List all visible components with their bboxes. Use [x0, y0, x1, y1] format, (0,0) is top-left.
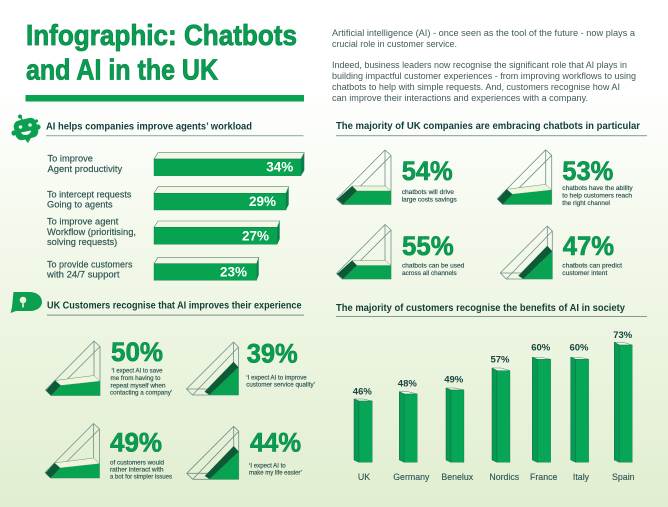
column: Nordics 57%: Nordics — [489, 472, 520, 482]
bar: 29% — [47, 187, 289, 210]
column: Nordics 57%: 57% — [490, 355, 510, 366]
stat: 53%: the right channel — [562, 200, 610, 207]
bar: 29%: To intercept requests — [47, 189, 132, 199]
stat: 44% — [187, 426, 302, 479]
bar chart: countries — [353, 330, 635, 482]
bar chart: agents workload — [46, 153, 304, 280]
column: France 60%: 60% — [531, 343, 551, 354]
stat: 55%: chatbots can be used — [402, 262, 465, 269]
column: Germany 48%: 48% — [398, 379, 417, 390]
stat: 49%: 49% — [110, 428, 162, 458]
title: Infographic: Chatbots — [26, 20, 297, 52]
stat: 44%: ‘I expect AI to — [249, 463, 286, 470]
bar: 29%: Going to agents — [47, 200, 113, 210]
heading: customers experience: UK Customers recognise that AI improves their experience — [47, 299, 302, 311]
column: France 60%: France — [530, 472, 557, 482]
bar: 29%: 29% — [249, 194, 276, 209]
intro text: can improve their interactions and experiences with a company. — [332, 93, 588, 104]
icon: prism 54% — [336, 150, 391, 204]
column: Benelux 49%: Benelux — [441, 472, 474, 482]
bar: 27%: To improve agent — [47, 217, 119, 227]
bar: 23%: 23% — [220, 265, 247, 280]
column: UK 46%: 46% — [353, 386, 372, 397]
column: Spain 73%: 73% — [613, 330, 633, 341]
title underline bar — [26, 95, 304, 102]
bar: 23% — [46, 257, 259, 280]
column: Spain 73% — [612, 330, 635, 482]
icon: prism 55% — [336, 224, 391, 279]
stat: 50%: ‘I expect AI to save — [112, 367, 163, 374]
bar: 23%: To provide customers — [47, 260, 133, 270]
stat: 53%: chatbots have the ability — [562, 185, 633, 192]
column: Nordics 57% — [489, 355, 520, 482]
stat: 49%: rather interact with — [110, 466, 164, 473]
stat: 50% — [46, 337, 173, 396]
heading: companies chatbots: The majority of UK companies are embracing chatbots in particular — [336, 120, 640, 132]
icon: prism 44% — [187, 426, 239, 479]
stat: 47%: customer intent — [562, 270, 607, 277]
icon: prism 50% — [46, 341, 100, 396]
column: UK 46% — [353, 386, 372, 482]
intro text: Artificial intelligence (AI) - once seen as the tool of the future - now plays a — [332, 28, 636, 39]
stat: 50%: contacting a company’ — [110, 389, 173, 396]
column: Benelux 49% — [441, 375, 474, 482]
stat: 44%: 44% — [250, 428, 301, 458]
column: France 60% — [530, 343, 557, 482]
stat: 44%: make my life easier’ — [249, 470, 302, 477]
bar: 23%: with 24/7 support — [46, 270, 120, 280]
bar: 27%: 27% — [242, 229, 269, 244]
title: and AI in the UK — [26, 54, 218, 86]
stat: 49%: of customers would — [110, 459, 164, 466]
stat: 54% — [336, 150, 457, 204]
column: Italy 60%: Italy — [573, 472, 590, 482]
stat: 53% — [497, 150, 633, 207]
stat: 47%: chatbots can predict — [562, 262, 622, 269]
icon: prism 53% — [497, 150, 552, 204]
stat: 39%: 39% — [247, 338, 298, 368]
icon: prism 47% — [500, 226, 552, 279]
intro text: chatbots to help with simple requests. And, customers recognise how AI — [332, 82, 620, 93]
icon: prism 39% — [186, 342, 238, 395]
stat: 53%: to help customers reach — [562, 193, 632, 200]
bar: 27% — [47, 217, 280, 247]
stat: 55% — [336, 224, 465, 279]
icon: robot — [11, 114, 41, 143]
stat: 49% — [45, 424, 173, 480]
stat: 55%: 55% — [402, 231, 454, 261]
column: Italy 60%: 60% — [569, 343, 589, 354]
stat: 49%: a bot for simpler issues — [110, 473, 173, 480]
column: Benelux 49%: 49% — [444, 375, 464, 386]
stat: 39%: customer service quality’ — [246, 382, 315, 389]
icon: speech bubble with lightbulb — [10, 292, 42, 313]
heading: agents workload: AI helps companies improve agents’ workload — [46, 120, 252, 132]
bar: 27%: solving requests) — [47, 237, 117, 247]
intro text: Indeed, business leaders now recognise the significant role that AI plays in — [332, 60, 627, 71]
stat: 54%: large costs savings — [402, 196, 457, 203]
stat: 50%: 50% — [111, 337, 163, 367]
bar: 27%: Workflow (prioritising, — [47, 227, 136, 237]
stat: 47%: 47% — [563, 231, 614, 261]
intro text: building impactful customer experiences - from improving workflows to using — [332, 71, 636, 82]
bar: 34%: To improve — [48, 154, 93, 164]
stat: 54%: 54% — [402, 156, 453, 186]
heading: benefits in society: The majority of customers recognise the benefits of AI in society — [336, 302, 625, 314]
column: Spain 73%: Spain — [612, 472, 635, 482]
column: UK 46%: UK — [358, 472, 370, 482]
stat: 54%: chatbots will drive — [402, 189, 454, 196]
bar: 34% — [48, 153, 304, 176]
stat: 47% — [500, 226, 622, 279]
stat: 39% — [186, 338, 315, 395]
bar: 34%: 34% — [266, 160, 293, 175]
stat: 53%: 53% — [562, 156, 613, 186]
stat: 55%: across all channels — [402, 270, 457, 277]
title — [26, 20, 297, 86]
stat: 50%: repeat myself when — [110, 382, 166, 389]
column: Germany 48% — [393, 379, 430, 482]
stat: 50%: me from having to — [110, 375, 161, 382]
stat: 39%: ‘I expect AI to improve — [246, 374, 307, 381]
bar: 34%: Agent productivity — [48, 164, 123, 174]
intro text — [332, 28, 636, 104]
column: Italy 60% — [569, 343, 590, 482]
column: Germany 48%: Germany — [393, 472, 430, 482]
intro text: crucial role in customer service. — [332, 39, 457, 50]
icon: prism 49% — [45, 424, 100, 478]
